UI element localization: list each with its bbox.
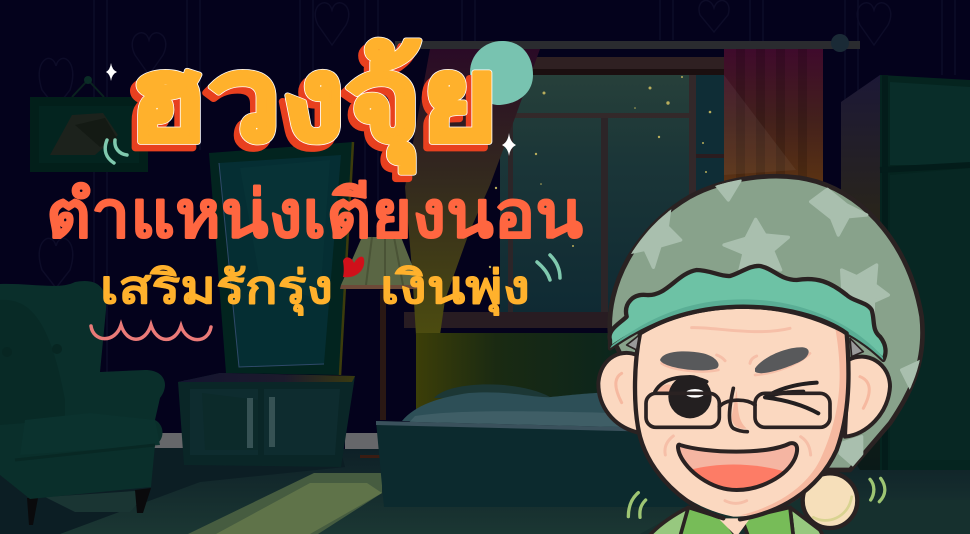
right wardrobe <box>841 75 970 470</box>
open mouth <box>678 443 797 490</box>
shirt and neck <box>648 507 823 534</box>
left curtain <box>405 49 540 335</box>
footboard <box>376 421 700 507</box>
teal accent ticks right <box>537 255 560 280</box>
ears <box>598 353 890 437</box>
face <box>635 307 849 519</box>
wardrobe mirror <box>209 142 353 375</box>
title: ฮวงจุ้ย: ฮวงจุ้ย <box>128 34 498 173</box>
winking eye <box>765 383 818 413</box>
floor lamp <box>340 237 420 458</box>
armchair <box>0 281 165 525</box>
curtain rod <box>395 34 860 52</box>
tagline: เงินพุ่ง: เงินพุ่ง <box>380 261 530 316</box>
nose shade <box>732 390 747 429</box>
nightcap <box>610 176 923 470</box>
icon: red heart <box>343 257 364 277</box>
pillow <box>434 384 550 398</box>
headband <box>609 266 886 360</box>
sparkle <box>106 63 117 81</box>
teal accent ticks left <box>105 140 127 163</box>
pink wavy underline <box>91 325 211 340</box>
subtitle: ตำแหน่งเตียงนอน: ตำแหน่งเตียงนอน <box>46 177 583 251</box>
wallpaper pattern <box>39 0 955 440</box>
baseboard <box>150 433 381 449</box>
gray hair <box>627 335 863 357</box>
cabinet <box>178 373 355 467</box>
eyebrows <box>660 347 810 375</box>
window sill <box>404 312 612 328</box>
teal circle accent <box>470 41 533 105</box>
sparkle <box>502 133 516 156</box>
pelmet above window <box>530 57 724 75</box>
right curtain <box>724 49 823 189</box>
bed <box>376 333 700 507</box>
window with night sky <box>489 74 724 314</box>
glasses <box>646 388 830 432</box>
character: smiling man in nightcap <box>598 176 923 534</box>
wrinkles <box>665 328 811 503</box>
title: ฮวงจุ้ย: ฮวงจุ้ย <box>128 34 498 173</box>
window stars <box>489 76 711 268</box>
tagline: เสริมรักรุ่ง: เสริมรักรุ่ง <box>100 261 333 316</box>
hair bun <box>803 473 857 528</box>
open eye <box>655 375 712 418</box>
motion ticks <box>628 478 885 517</box>
headboard <box>416 333 646 448</box>
blanket <box>402 392 700 430</box>
floor <box>0 448 970 534</box>
title: ฮวงจุ้ย: ฮวงจุ้ย <box>123 40 493 179</box>
picture frame on wall <box>30 76 148 172</box>
